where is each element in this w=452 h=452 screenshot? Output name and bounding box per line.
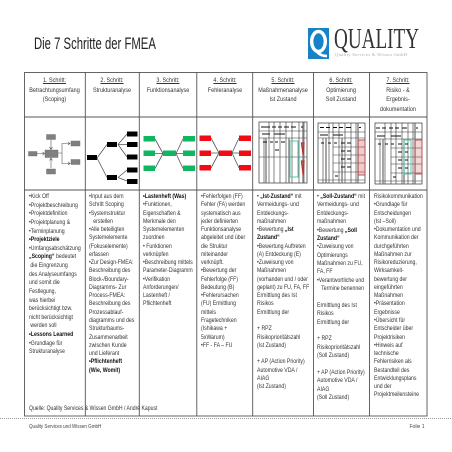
text: step 6: • „Soll-Zustand“ mit Vermeidungs- und Entdeckungs- maßnahmen •Bewertung „Soll Zustand“ •Zuweisung von Optimierungs Maßnahmen zu FU, FA, FF •Verantwortliche und Termine benennen Ermittlung des Ist Risikos Ermittlung der + RPZ Risikoprioritätszahl (Soll Zustand) + AP (Action Priority) Automotive VDA / AIAG (Soll Zustand) — [317, 193, 365, 401]
icon: blue Q square — [308, 28, 329, 59]
step 4 header: 4. Schritt: Fehleranalyse — [208, 77, 242, 94]
step 3 header: 3. Schritt: Funktionsanalyse — [147, 77, 189, 94]
icon: structure tree — [87, 132, 138, 184]
icon: FMEA form step 6 — [318, 122, 366, 184]
logo: Quality Services & Wissen GmbH — [308, 23, 419, 59]
logo wordmark: QUALITY — [334, 23, 419, 55]
step 1 header: 1. Schritt: Betrachtungsumfang (Scoping) — [29, 77, 80, 103]
step 6 header: 6. Schritt: Optimierung Soll Zustand — [326, 77, 356, 103]
step 7 header: 7. Schritt: Risiko - & Ergebnis- dokumentation — [380, 77, 416, 112]
text: step 5: • „Ist-Zustand“ mit Vermeidungs- und Entdeckungs- maßnahmen •Bewertung „Ist Zustand“ •Bewertung Auftreten (A) Entdeckung (E) •Zuweisung von Maßnahmen (vorhanden und / oder geplant) zu FU, FA, FF Ermittlung des Ist Risikos Ermittlung der + RPZ Risikoprioritätszahl (Ist Zustand) + AP (Action Priority) Automotive VDA / AIAG (Ist Zustand) — [257, 193, 309, 390]
source note: Quelle: Quality Services & Wissen GmbH / André Kapust — [28, 405, 157, 412]
text: step 3: •Lastenheft (Was) •Funktionen, Eigenschaften & Merkmale den Systemelementen zuordnen • Funktionen verknüpfen •Beschreibung mittels Parameter-Diagramm •Verifikation Anforderungen/ Lastenheft / Pflichtenheft — [143, 193, 193, 307]
logo tagline: Quality Services & Wissen GmbH — [335, 52, 407, 56]
text: step 7: Risikokommunikation •Grundlage für Entscheidungen (Ist –Soll) •Dokumentation und Kommunikation der durchgeführten Maßnahmen zur Risikoreduzierung, Wirksamkeit- bewertung der eingeführten Maßnahmen •Präsentation Ergebnisse •Übersicht für Entscheider über Projektrisiken •Hinweis auf technische Fehlerrisiken als Bestandteil des Entwicklungsplans und der Projektmeilensteine — [374, 193, 422, 398]
icon: scoping block diagram — [28, 134, 80, 174]
icon: function network (green) — [144, 136, 195, 171]
text: step 2: •Input aus dem Schritt Scoping •Systemstruktur erstellen •Alle beteiligten Systemelemente (Fokuselemente) erfassen •Zur Design-FMEA: Beschreibung des Block-/Boundary- Diagramms- Zur Process-FMEA: Beschreibung des Prozessablauf- diagramms und des Strukturbaums- Zusammenarbeit zwischen Kunde und Lieferant •Pflichtenheft (Wie, Womit) — [89, 193, 134, 374]
footer left: Quality Services und Wissen GmbH — [29, 424, 101, 430]
text: step 1: •Kick Off •Projektbeschreibung •Projektdefinition •Projektplanung & •Terminplanung •Projektziele •Umfangsabschätzung „Scoping“ bedeutet die Eingrenzung des Analyseumfangs und somit die Festlegung, was hierbei berücksichtigt bzw. nicht berücksichtigt werden soll •Lessons Learned •Grundlage für Strukturanalyse — [29, 193, 81, 355]
step 5 header: 5. Schritt: Maßnahmenanalyse Ist Zustand — [258, 77, 308, 103]
footer right: slide number: Folie 1 — [410, 424, 425, 430]
icon: FMEA form step 7 — [374, 122, 422, 184]
icon: failure network (red) — [200, 136, 251, 170]
icon: FMEA form step 5 — [258, 122, 308, 184]
step 2 header: 2. Schritt: Strukturanalyse — [93, 77, 131, 94]
title: Die 7 Schritte der FMEA — [34, 35, 156, 53]
text: step 4: •Fehlerfolgen (FF) Fehler (FA) werden systematisch aus jeder definierten Funktionsanalyse abgeleitet und über die Struktur miteinander verknüpft. •Bewertung der Fehlerfolge (FF) Bedeutung (B) •Fehlerursachen (FU) Ermittlung mittels Fragetechniken (Ishikawa + 5xWarum) •FF - FA – FU — [201, 193, 245, 349]
